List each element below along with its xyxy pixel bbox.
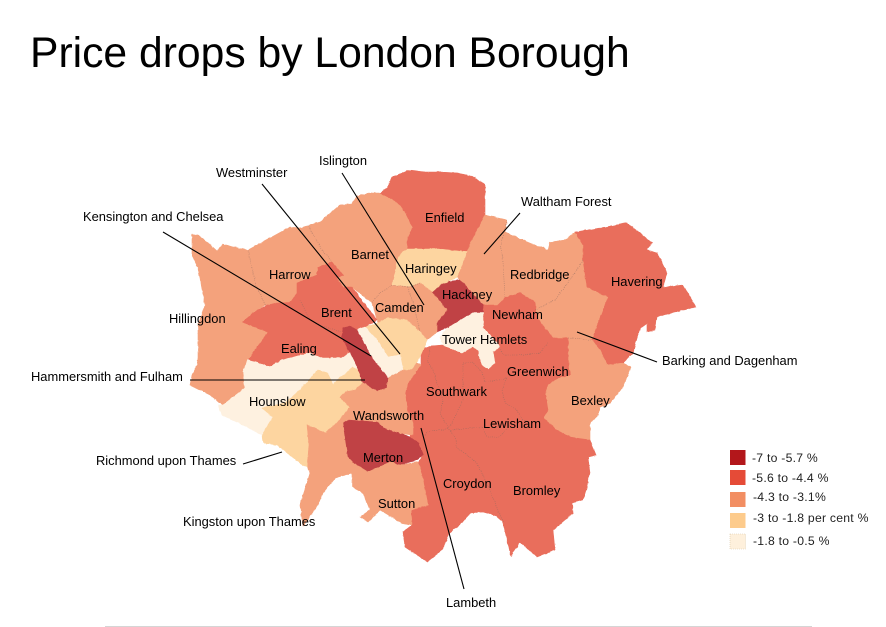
leader line: Kensington and Chelsea xyxy=(163,232,371,356)
region: Brent and Ealing xyxy=(242,262,377,367)
label: Greenwich: Greenwich xyxy=(507,364,569,379)
label: Barking and Dagenham: Barking and Dagenham xyxy=(662,353,797,368)
label: Richmond upon Thames: Richmond upon Thames xyxy=(96,453,236,468)
label: Bromley: Bromley xyxy=(513,483,561,498)
legend text: -7 to -5.7: -7 to -5.7 % xyxy=(752,451,818,465)
region: Westminster xyxy=(365,318,427,370)
region: Enfield xyxy=(380,170,485,252)
label: Lewisham: Lewisham xyxy=(483,416,541,431)
label: Lambeth: Lambeth xyxy=(446,595,496,610)
region: Tower Hamlets xyxy=(440,312,500,369)
label: Tower Hamlets: Tower Hamlets xyxy=(442,332,527,347)
label: Havering: Havering xyxy=(611,274,663,289)
label: Hounslow: Hounslow xyxy=(249,394,306,409)
choropleth map of London boroughs xyxy=(190,170,696,562)
label: Southwark: Southwark xyxy=(426,384,487,399)
legend text: -4.3 to -3.1: -4.3 to -3.1% xyxy=(753,490,826,504)
legend text: -3 to -1.8: -3 to -1.8 per cent % xyxy=(753,511,869,525)
leader line: Lambeth xyxy=(421,428,464,589)
region: Richmond upon Thames xyxy=(262,367,363,467)
legend text: -5.6 to -4.4: -5.6 to -4.4 % xyxy=(752,471,829,485)
label: Barnet: Barnet xyxy=(351,247,389,262)
label: Hillingdon: Hillingdon xyxy=(169,311,226,326)
label: Merton: Merton xyxy=(363,450,403,465)
label: Redbridge: Redbridge xyxy=(510,267,569,282)
legend swatch: -1.8 to -0.5 xyxy=(730,534,746,549)
label: Ealing: Ealing xyxy=(281,341,317,356)
legend xyxy=(730,450,869,549)
region: Haringey xyxy=(392,249,467,292)
label: Brent: Brent xyxy=(321,305,352,320)
region: Bexley xyxy=(543,338,631,440)
label: Harrow: Harrow xyxy=(269,267,311,282)
leader line: Richmond upon Thames xyxy=(243,452,282,464)
legend swatch: -5.6 to -4.4 xyxy=(730,470,746,485)
footer rule xyxy=(105,626,812,627)
region: Merton xyxy=(343,420,423,472)
title: Price drops by London Borough xyxy=(30,29,630,77)
legend swatch: -7 to -5.7 xyxy=(730,450,746,465)
borough boundaries xyxy=(248,220,592,523)
label: Enfield: Enfield xyxy=(425,210,464,225)
label: Islington: Islington xyxy=(319,153,367,168)
label: Kensington and Chelsea: Kensington and Chelsea xyxy=(83,209,224,224)
region: Havering xyxy=(575,223,696,365)
leader line: Hammersmith and Fulham xyxy=(190,379,365,381)
region: Harrow and Barnet xyxy=(248,193,413,305)
leader line: Westminster xyxy=(262,184,400,354)
region: Camden and Islington xyxy=(372,283,447,340)
label: Kingston upon Thames: Kingston upon Thames xyxy=(183,514,315,529)
label: Wandsworth: Wandsworth xyxy=(353,408,424,423)
borough labels xyxy=(31,153,797,610)
label: Croydon: Croydon xyxy=(443,476,492,491)
region: Redbridge and Barking xyxy=(500,232,608,340)
region: Hackney xyxy=(432,280,483,332)
label: Camden: Camden xyxy=(375,300,424,315)
legend swatch: -4.3 to -3.1 xyxy=(730,492,746,507)
region: Kensington and Chelsea xyxy=(357,327,403,378)
region: Wandsworth xyxy=(337,363,421,435)
label: Sutton: Sutton xyxy=(378,496,415,511)
region: Kingston upon Thames xyxy=(300,423,355,526)
label: Haringey: Haringey xyxy=(405,261,457,276)
region: Sutton xyxy=(352,462,428,525)
region: Waltham Forest xyxy=(457,215,523,305)
label: Waltham Forest: Waltham Forest xyxy=(521,194,612,209)
legend swatch: -3 to -1.8 xyxy=(730,513,746,528)
leader line: Barking and Dagenham xyxy=(577,332,657,362)
label: Hackney: Hackney xyxy=(442,287,493,302)
label: Westminster: Westminster xyxy=(216,165,288,180)
legend text: -1.8 to -0.5: -1.8 to -0.5 % xyxy=(753,534,830,548)
label: Newham: Newham xyxy=(492,307,543,322)
label: Hammersmith and Fulham: Hammersmith and Fulham xyxy=(31,369,183,384)
region: Hillingdon xyxy=(190,234,268,405)
label: Bexley: Bexley xyxy=(571,393,610,408)
leader line: Waltham Forest xyxy=(484,213,520,254)
region: Hounslow xyxy=(218,353,358,435)
region: South-east boroughs (Newham, Greenwich, Southwark, Lewisham, Bromley, Croydon) xyxy=(403,293,596,562)
leader line: Islington xyxy=(342,173,424,305)
region: Hammersmith and Fulham xyxy=(342,326,388,391)
